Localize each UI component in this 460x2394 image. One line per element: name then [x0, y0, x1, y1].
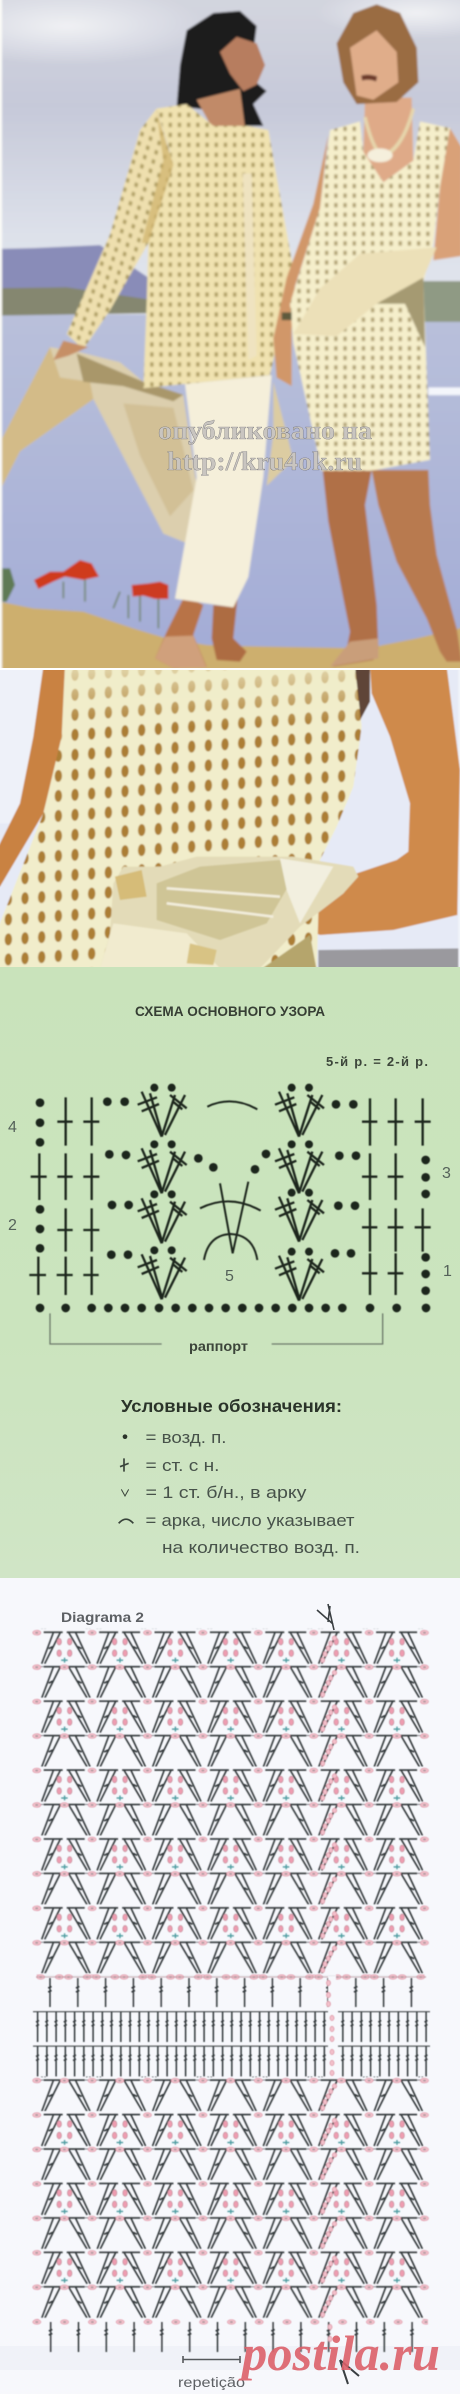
- left arm: [0, 667, 67, 887]
- repeat bracket: [50, 1313, 383, 1344]
- scarf tail: [263, 934, 317, 967]
- side and pair chain dots: [36, 1097, 430, 1295]
- scarf held by the left woman: [50, 346, 196, 543]
- centre arcs and V: [200, 1101, 261, 1260]
- upper and fore right arm: [355, 667, 370, 722]
- dark hair of left woman: [177, 11, 267, 126]
- row numbers: 1: [443, 1263, 452, 1280]
- arrow: end of repeat: [340, 2360, 359, 2384]
- legend: [119, 1396, 360, 1557]
- row numbers: 4: [8, 1119, 17, 1136]
- stitch rows: [32, 1629, 430, 2355]
- row numbers: 3: [442, 1165, 451, 1182]
- repeat label: раппорт: [189, 1338, 248, 1354]
- repeat bar: [183, 2356, 240, 2363]
- watermark: site url: http://kru4ok.ru: [167, 447, 362, 476]
- row note: 5-й р. = 2-й р.: [326, 1054, 428, 1069]
- V clusters: [138, 1084, 324, 1301]
- chart title: СХЕМА ОСНОВНОГО УЗОРА: [135, 1003, 325, 1019]
- arm of right woman: [273, 134, 328, 386]
- dress of right woman: [290, 121, 450, 471]
- panel: Diagrama 2 crochet chart: [0, 1578, 460, 2394]
- row numbers: [8, 1119, 452, 1285]
- legend entries: = ст. с н.: [146, 1456, 220, 1475]
- row numbers: 2: [8, 1217, 17, 1234]
- legend title: Условные обозначения:: [121, 1396, 342, 1416]
- arrow: start of repeat: [317, 1604, 334, 1630]
- legend entries: на количество возд. п.: [162, 1538, 360, 1557]
- postila watermark: postila.ru: [238, 2325, 440, 2381]
- legend entries: = возд. п.: [146, 1428, 226, 1447]
- scarf at right woman's waist: [293, 247, 437, 336]
- jacket of left woman: [143, 104, 293, 388]
- diagram title: Diagrama 2: [61, 1610, 144, 1625]
- panel: close-up photo of the mesh dress: [0, 670, 460, 967]
- crochet symbol chart: [29, 1084, 431, 1344]
- row numbers: 5: [225, 1268, 234, 1285]
- legend entries: = арка, число указывает: [146, 1511, 355, 1530]
- foundation chain: [36, 1304, 430, 1312]
- watermark: published on: опубликовано на: [158, 416, 372, 445]
- panel: photo of two women on the shore: [0, 0, 460, 705]
- double crochet crosses: [29, 1097, 431, 1295]
- sheer scarf: [100, 857, 358, 968]
- legend entries: [146, 1428, 360, 1557]
- head of right woman: [337, 4, 418, 104]
- trousers: [175, 375, 272, 607]
- legend entries: = 1 ст. б/н., в арку: [146, 1483, 307, 1502]
- panel: green crochet chart: [0, 967, 460, 1578]
- mesh dress: [0, 667, 362, 970]
- repeat label: repetição: [178, 2374, 245, 2390]
- legend symbols: [119, 1434, 133, 1523]
